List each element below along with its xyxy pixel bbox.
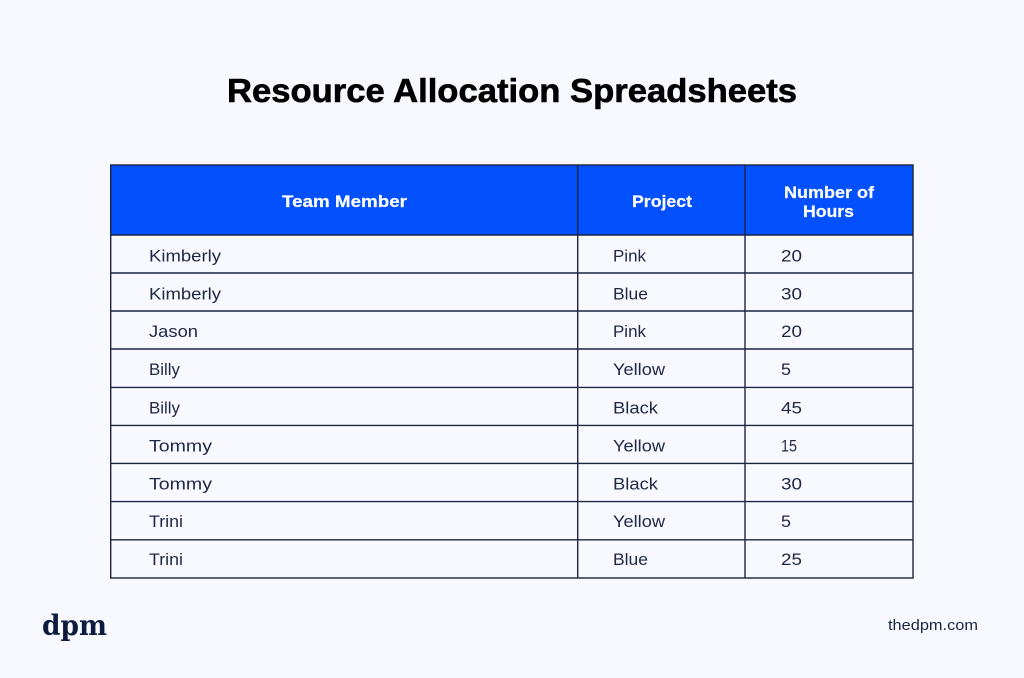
table header row: Number of	[784, 183, 874, 202]
row: Billy Yellow 5: Billy	[149, 360, 180, 379]
row: Trini Blue 25: Trini	[149, 550, 183, 569]
row: Tommy Yellow 15: Yellow	[613, 436, 666, 456]
title: Resource Allocation Spreadsheets	[227, 73, 797, 110]
table header row: Project	[632, 192, 692, 211]
row: Tommy Yellow 15: Tommy	[149, 436, 213, 456]
row: Trini Yellow 5	[149, 512, 791, 531]
row: Tommy Black 30: Black	[613, 474, 659, 494]
row: Tommy Black 30: 30	[781, 474, 802, 494]
row: Kimberly Blue 30: 30	[781, 284, 802, 304]
row: Jason Pink 20: Pink	[613, 322, 646, 341]
row: Kimberly Pink 20: Kimberly	[149, 246, 222, 266]
logo: dpm: dpm	[42, 609, 107, 642]
row: Trini Yellow 5: 5	[781, 512, 791, 531]
row: Billy Black 45	[149, 398, 802, 418]
row: Tommy Black 30: Tommy	[149, 474, 213, 494]
row: Billy Yellow 5: Yellow	[613, 360, 666, 379]
row: Billy Yellow 5	[149, 360, 791, 379]
row: Trini Yellow 5: Yellow	[613, 512, 666, 531]
row: Jason Pink 20: Jason	[149, 322, 198, 341]
table	[111, 165, 913, 578]
row: Trini Blue 25	[149, 550, 802, 569]
row: Kimberly Blue 30: Kimberly	[149, 284, 222, 304]
row: Kimberly Pink 20: 20	[781, 246, 802, 266]
row: Kimberly Pink 20	[149, 246, 802, 266]
row: Billy Black 45: 45	[781, 398, 802, 418]
row: Tommy Yellow 15	[149, 436, 797, 456]
row: Billy Yellow 5: 5	[781, 360, 791, 379]
row: Trini Yellow 5: Trini	[149, 512, 183, 531]
row: Tommy Black 30	[149, 474, 802, 494]
row: Tommy Yellow 15: 15	[781, 436, 797, 456]
website url: thedpm.com	[888, 617, 978, 634]
row: Kimberly Pink 20: Pink	[613, 246, 646, 266]
row: Jason Pink 20: 20	[781, 322, 802, 341]
row: Billy Black 45: Billy	[149, 398, 180, 418]
row: Kimberly Blue 30: Blue	[613, 284, 648, 304]
row: Billy Black 45: Black	[613, 398, 659, 418]
table header row: Hours	[803, 202, 854, 221]
row: Kimberly Blue 30	[149, 284, 802, 304]
row: Trini Blue 25: 25	[781, 550, 802, 569]
table header row: Team Member	[282, 192, 407, 211]
row: Trini Blue 25: Blue	[613, 550, 648, 569]
table header row	[111, 165, 913, 235]
row: Jason Pink 20	[149, 322, 802, 341]
